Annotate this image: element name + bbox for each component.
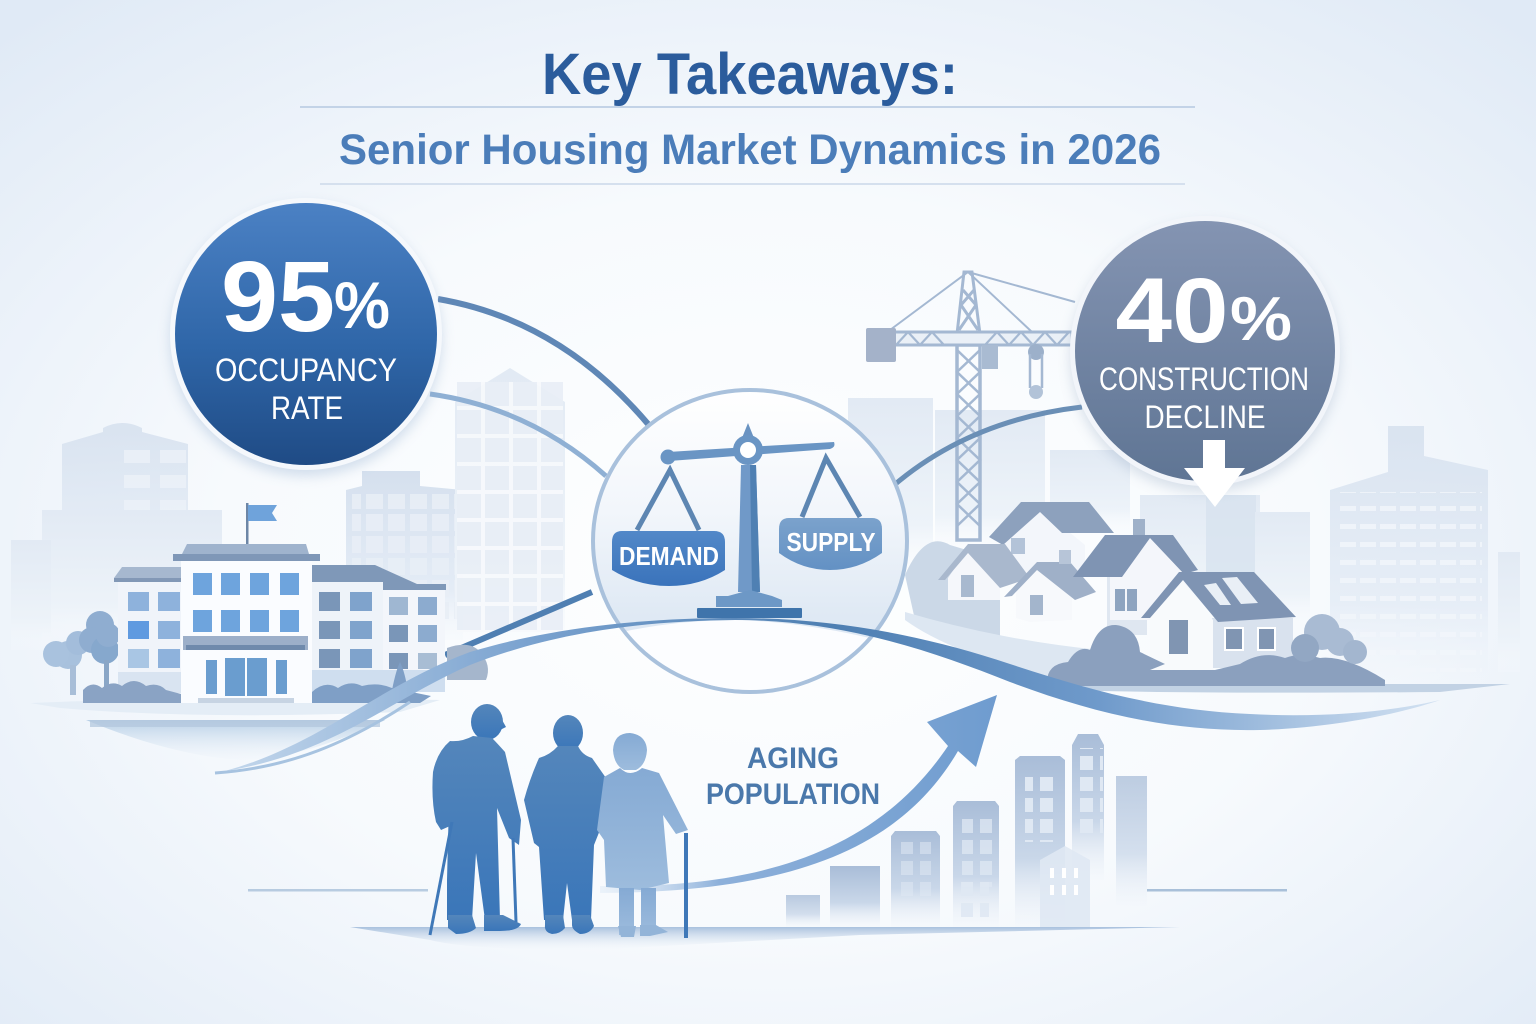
callout: construction decline: [1070, 216, 1340, 507]
title: Key Takeaways:: [542, 42, 958, 107]
mid house: [1073, 519, 1198, 635]
figure: man with canes: [430, 704, 521, 935]
label: supply pan: [779, 518, 882, 570]
label: aging population: [706, 742, 880, 811]
callout: construction decline: %: [1230, 285, 1292, 354]
icon: houses: [905, 502, 1510, 693]
callout: occupancy rate: OCCUPANCY: [215, 352, 397, 388]
callout: construction decline: CONSTRUCTION: [1099, 361, 1309, 397]
callout: occupancy rate: 95: [221, 241, 335, 353]
hills and ground: [905, 541, 1510, 693]
icon: senior housing building: [30, 503, 488, 760]
panel: central scale circle: [593, 390, 907, 692]
label: demand pan: [612, 531, 725, 586]
icon: balance scale: [612, 423, 882, 618]
arrow: rising trend: [600, 695, 997, 893]
icon: construction crane: [866, 272, 1075, 540]
ground lines: [248, 889, 1287, 892]
main block: [173, 503, 320, 703]
trees: [43, 611, 120, 695]
subtitle: Senior Housing Market Dynamics in 2026: [339, 126, 1161, 174]
background skyline: left: [11, 368, 565, 650]
title block: [300, 42, 1195, 185]
connector curves: [430, 299, 1082, 655]
figure: woman with cane: [597, 733, 688, 938]
wave ribbon: [215, 618, 1440, 773]
callout: construction decline: 40: [1116, 260, 1228, 362]
callout: construction decline: DECLINE: [1144, 399, 1266, 435]
shrubs and trees: [1047, 614, 1385, 686]
label: demand pan: DEMAND: [619, 541, 719, 571]
callout: occupancy rate: RATE: [271, 390, 343, 426]
icon: seniors group: [430, 704, 688, 938]
front house: [1141, 572, 1296, 672]
label: aging population: POPULATION: [706, 778, 880, 811]
shrubs: [83, 645, 488, 703]
callout: occupancy rate: [170, 198, 442, 476]
background skyline: right: [848, 398, 1520, 680]
ground shadow: [350, 927, 1180, 950]
figure: central man: [524, 715, 606, 934]
icon: skyline lower: [786, 734, 1147, 927]
label: aging population: AGING: [747, 742, 839, 775]
left wing: [114, 567, 181, 693]
right wings: [312, 565, 446, 693]
small left house: [938, 544, 1030, 600]
callout: occupancy rate: %: [334, 268, 390, 342]
back house: [989, 502, 1114, 575]
middle small house: [1004, 550, 1096, 622]
arrow: decline: [1184, 440, 1245, 507]
ground and reflection: [30, 699, 440, 760]
label: supply pan: SUPPLY: [786, 527, 876, 557]
